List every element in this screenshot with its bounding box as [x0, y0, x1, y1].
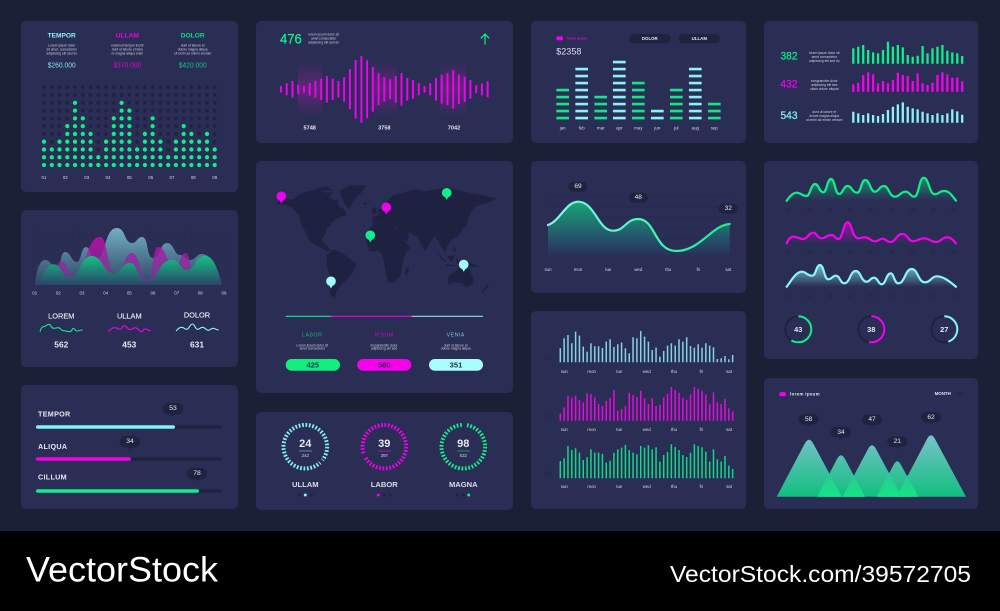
bubble: 47: 47	[868, 416, 876, 423]
row: 382	[780, 42, 962, 64]
axis labels: 09	[212, 175, 218, 180]
stat: ullam	[108, 312, 151, 349]
chart: green columns: thu	[671, 484, 678, 489]
map stat: labor: amet consectetur	[300, 347, 326, 351]
map stat: labor: 425	[306, 360, 320, 369]
stat: ullam: 453	[122, 339, 137, 349]
weekday labels: fri	[696, 267, 700, 272]
axis labels: cyan wave	[786, 294, 957, 298]
stat: 476	[280, 31, 339, 47]
chart: magenta columns: sat	[726, 427, 733, 432]
heading: dolor column: dolore magna aliqua	[178, 47, 208, 51]
stat: lorem: 562	[54, 339, 69, 349]
gauge: labor: 397	[381, 453, 389, 458]
row: 543: dolore magna aliqua	[809, 114, 839, 118]
row: 432: ullam dolore aliquat	[810, 87, 839, 91]
chart: green columns	[544, 444, 733, 489]
chart: cyan columns: sat	[726, 369, 733, 374]
chart: magenta columns: mon	[587, 427, 597, 432]
progress: cillum: 78	[193, 470, 201, 477]
chart: magenta columns: sun	[561, 427, 568, 432]
map stat: ipsum: IPSUM	[374, 332, 394, 338]
chart: cyan columns: fri	[699, 369, 703, 374]
ring: 43: 43	[794, 325, 802, 334]
map stat: ipsum	[357, 332, 411, 371]
month selector	[935, 391, 962, 396]
chart: magenta wave bars	[281, 56, 488, 123]
chart: green columns: fri	[699, 484, 703, 489]
weekday labels: sat	[725, 267, 732, 272]
heading: dolor column: Ut enim ad minim veniam	[174, 51, 212, 55]
weekday labels	[544, 267, 732, 272]
bubble: 21: 21	[894, 438, 901, 445]
wave labels: 5748	[303, 126, 316, 132]
icon: up arrow	[481, 34, 489, 44]
map pin: green africa	[366, 230, 375, 242]
heading: ullam column: eiusmod tempor incidi	[111, 43, 144, 47]
panel: weekly column charts	[531, 311, 746, 509]
month labels: feb	[579, 126, 585, 130]
map stat: ipsum: adipiscing elit sed	[371, 347, 397, 351]
chart: cyan segmented bars	[582, 60, 695, 119]
legend	[556, 36, 587, 40]
bubble: 32	[719, 204, 738, 214]
ring: 27	[931, 316, 957, 342]
stat: lorem: LOREM	[48, 312, 74, 320]
chart: magenta columns: tue	[616, 427, 623, 432]
stat: 476: lorem ipsum dolor sit	[308, 33, 339, 37]
gauge: labor	[355, 417, 414, 496]
axis labels: 02	[56, 290, 61, 296]
bubble: 34	[831, 427, 851, 439]
heading: ullam column	[111, 32, 144, 70]
axis labels	[32, 290, 227, 296]
bubble: 69: 69	[574, 183, 582, 190]
chart: green columns: sat	[726, 484, 733, 489]
month selector: MONTH	[935, 391, 951, 396]
stat: 476: 476	[280, 31, 302, 47]
row: 432: incsgraindim dolor	[811, 79, 839, 83]
footer bar	[0, 531, 1000, 611]
chart: magenta columns: 02	[544, 414, 552, 420]
bubble: 62	[921, 412, 941, 424]
axis labels	[42, 175, 218, 180]
progress: tempor: TEMPOR	[38, 410, 71, 418]
heading: dolor column: dunt ut labore et	[181, 43, 205, 47]
map pin: green russia	[442, 188, 452, 200]
row: 382: adipiscing elit sed do	[809, 59, 840, 63]
panel: radial gauges	[256, 412, 513, 510]
axis labels: cyan wave: 06	[889, 294, 895, 298]
axis labels: magenta wave: 09	[951, 249, 957, 254]
chart: green columns: sun	[561, 484, 568, 489]
stat: 476: amet consectetur	[311, 37, 337, 41]
axis labels: green wave	[786, 208, 957, 212]
axis labels: cyan wave: 04	[848, 294, 853, 298]
heading: dolor column	[174, 32, 212, 70]
panel: mountain chart	[764, 378, 978, 509]
weekday labels: wed	[634, 267, 643, 272]
gauge: ullam: 24	[299, 438, 312, 450]
chart: mountains	[777, 435, 966, 497]
axis labels: 07	[170, 175, 175, 180]
axis labels: magenta wave: 05	[869, 249, 874, 254]
month labels	[559, 126, 718, 130]
axis labels: green wave: 06	[889, 208, 895, 212]
chart: cyan columns: tue	[616, 369, 623, 374]
month labels: apr	[616, 126, 623, 130]
month labels: jun	[653, 126, 661, 130]
bubble: 47	[862, 414, 882, 427]
month labels: sep	[711, 126, 718, 130]
axis labels: cyan wave: 08	[931, 294, 936, 298]
legend: lorem ipsum	[790, 392, 820, 396]
heading: tempor column: adipiscing elit sed do	[46, 51, 77, 55]
axis labels: 05	[127, 175, 132, 180]
bubble: 62: 62	[927, 414, 935, 421]
heading: dolor column: DOLOR	[181, 32, 205, 40]
heading: ullam column: $370.000	[113, 60, 141, 70]
ring: 38: 38	[867, 325, 875, 334]
weekday labels: tue	[605, 267, 612, 272]
chart: cyan columns: sun	[561, 369, 568, 374]
axis labels: 04	[106, 175, 111, 180]
chart: cyan wave	[787, 265, 956, 287]
button: ullam: ULLAM	[692, 36, 707, 41]
chart: green columns: 03	[544, 472, 552, 478]
chart: cyan columns: wed	[643, 369, 651, 374]
ring: 27: 27	[940, 325, 948, 334]
axis labels: cyan wave: 02	[807, 294, 812, 298]
progress: aliqua: ALIQUA	[38, 442, 67, 451]
axis labels: 09	[222, 290, 227, 296]
row: 543: dunt ut labore et	[812, 110, 836, 114]
row: 543: ut enim ad minim veniam	[806, 118, 843, 122]
bubble: 58	[799, 414, 819, 426]
wave labels: 3758	[378, 126, 391, 132]
month labels: aug	[692, 126, 700, 130]
axis labels: green wave: 09	[951, 208, 957, 212]
axis labels: magenta wave: 08	[931, 249, 936, 254]
stat: dolor: DOLOR	[184, 310, 210, 320]
footer logo: VectorStock	[26, 550, 219, 590]
heading: ullam column: ULLAM	[116, 32, 139, 40]
map stat: venia	[429, 332, 483, 371]
chart: magenta columns	[544, 387, 733, 432]
map pin: cyan australia	[459, 260, 468, 272]
bubble: 48	[629, 193, 648, 203]
progress: aliqua	[36, 436, 222, 461]
axis labels: cyan wave: 03	[828, 294, 833, 298]
axis labels: magenta wave: 06	[889, 249, 895, 254]
progress: cillum	[36, 468, 222, 493]
wave glow bands	[298, 63, 466, 115]
axis labels: cyan wave: 05	[869, 294, 874, 298]
month labels: mar	[597, 126, 605, 130]
row: 432: 432	[780, 79, 798, 91]
chart: green segmented bars	[563, 82, 714, 119]
gauge: ullam: 242	[302, 453, 310, 458]
wave labels	[303, 126, 460, 132]
chart: magenta columns: fri	[699, 427, 703, 432]
axis labels: 03	[80, 290, 85, 296]
chart: cyan columns: thu	[671, 369, 678, 374]
axis labels: magenta wave: 04	[848, 249, 853, 254]
panel: progress bars	[21, 385, 238, 509]
bubble: 34: 34	[837, 429, 845, 436]
axis labels: 06	[148, 175, 154, 180]
button: dolor	[629, 34, 671, 43]
value: $2358: $2358	[556, 47, 581, 57]
panel: dot matrix chart	[21, 21, 238, 192]
gauge: magna: 98	[457, 438, 469, 450]
stat: 476: adipiscing elit sed do	[308, 41, 339, 45]
map stat: venia: dunt ut labore et	[444, 343, 468, 347]
map stat: venia: 351	[450, 360, 463, 369]
axis labels: 05	[127, 290, 132, 296]
panel: audio wave chart	[256, 21, 513, 143]
map stat: venia: dolore magna aliqua	[441, 347, 471, 351]
map stat: ipsum: Incsgraindim dolor	[371, 343, 398, 347]
chart: magenta columns: wed	[643, 427, 651, 432]
axis labels: green wave: 03	[828, 208, 833, 212]
gauge: ullam	[275, 416, 336, 496]
axis labels: 01	[42, 175, 47, 180]
weekday labels: mon	[574, 267, 583, 272]
axis labels: cyan wave: 01	[786, 294, 792, 298]
bubble: 32: 32	[725, 205, 732, 212]
gauge: magna: MAGNA	[449, 480, 478, 489]
row: 382: amet consectetur	[812, 55, 838, 59]
heading: tempor column: TEMPOR	[48, 32, 76, 40]
progress: cillum: CILLUM	[38, 472, 67, 482]
tri-colour divider line	[286, 315, 483, 317]
heading: tempor column: sit amet, consectetur	[46, 47, 78, 51]
stat: lorem	[40, 312, 83, 349]
gauge: labor: 39	[378, 438, 390, 450]
chart: green dot columns	[44, 103, 215, 165]
map stat: ipsum: 580	[378, 360, 391, 369]
row: 382: lorem ipsum dolor sit	[809, 51, 840, 55]
row: 432	[780, 72, 962, 92]
weekday labels: sun	[544, 267, 552, 272]
stat: dolor	[176, 310, 219, 349]
row: 543	[780, 102, 962, 123]
button: dolor: DOLOR	[642, 36, 659, 41]
chart: layered area waves	[33, 228, 225, 285]
axis labels: cyan wave: 07	[910, 294, 916, 298]
row: 432: adipiscing elit sed	[811, 83, 837, 87]
panel: segmented bar chart	[531, 21, 746, 143]
panel: number rows with bars	[764, 21, 978, 143]
month labels: jan	[559, 126, 566, 130]
axis labels: 02	[63, 175, 68, 180]
row: 543: 543	[780, 110, 798, 122]
grid lines	[548, 196, 730, 250]
axis labels: magenta wave: 01	[786, 249, 792, 254]
axis labels: green wave: 08	[931, 208, 936, 212]
wave labels: 7042	[448, 126, 460, 132]
axis labels: magenta wave: 07	[910, 249, 916, 254]
heading: tempor column: $260.000	[48, 60, 76, 70]
chart: cyan columns: mon	[587, 369, 597, 374]
weekday labels: thu	[665, 267, 672, 272]
axis labels: green wave: 02	[807, 208, 812, 212]
axis labels: 08	[198, 290, 203, 296]
chart: magenta columns: thu	[671, 427, 678, 432]
chart: area fill	[548, 202, 730, 257]
axis labels: 04	[103, 290, 109, 296]
chart: green columns: wed	[643, 484, 651, 489]
axis labels: 08	[191, 175, 196, 180]
ring: 38	[858, 316, 884, 342]
map: world continents	[276, 185, 497, 298]
row: 382: 382	[780, 51, 798, 63]
map stat: labor: LABOR	[302, 332, 322, 338]
month labels: jul	[673, 126, 679, 130]
gauge: ullam: ULLAM	[292, 480, 319, 489]
footer url: VectorStock.com/39572705	[670, 561, 971, 587]
chart: dark dot grid	[44, 87, 215, 165]
chart: magenta wave	[787, 222, 956, 243]
heading: ullam column: dunt ut labore et dolo	[112, 47, 143, 51]
axis labels: green wave: 01	[786, 208, 792, 212]
axis labels: green wave: 05	[869, 208, 874, 212]
chart: cyan columns	[544, 331, 733, 374]
axis labels: green wave: 04	[848, 208, 853, 212]
heading: ullam column: re magna aliqua enim	[111, 51, 143, 55]
heading: tempor column: Lorem ipsum dolor	[48, 43, 76, 47]
chart: green columns: tue	[616, 484, 623, 489]
panel: world map	[256, 161, 513, 393]
ring: 43	[785, 316, 811, 342]
gauge: magna: 532	[460, 453, 468, 458]
progress: tempor	[36, 403, 222, 429]
axis labels: green wave: 07	[910, 208, 916, 212]
heading: tempor column	[46, 32, 78, 70]
chart: line	[548, 202, 730, 251]
bubble: 69	[568, 182, 588, 192]
map stat: venia: VENIA	[447, 332, 465, 338]
bubble: 58: 58	[805, 416, 813, 423]
axis labels: 01	[32, 290, 38, 296]
map pin: cyan south america	[326, 276, 336, 288]
month labels: may	[634, 126, 643, 130]
bubble: 21	[887, 436, 907, 449]
legend: lorem ipsum	[567, 36, 587, 40]
map stat: labor: Lorem ipsum dolor sit	[297, 343, 328, 347]
heading: dolor column: $420.000	[179, 60, 207, 70]
axis labels: magenta wave: 03	[828, 249, 833, 254]
chart: green wave	[787, 178, 956, 201]
axis labels: magenta wave	[786, 249, 957, 254]
bubble: 48: 48	[635, 194, 642, 201]
panel: area chart with sparklines	[21, 210, 238, 367]
axis labels: 03	[84, 175, 90, 180]
gauge: labor: LABOR	[371, 480, 398, 489]
progress: tempor: 53	[169, 405, 177, 412]
chart: green columns: mon	[587, 484, 597, 489]
axis labels: 06	[151, 290, 156, 296]
chart: cyan columns: 01	[544, 354, 552, 362]
map stat: labor	[286, 332, 340, 371]
panel: wave lines and rings	[764, 161, 978, 359]
map pin: magenta north america	[276, 191, 286, 204]
map pin: magenta europe	[382, 202, 391, 214]
axis labels: cyan wave: 09	[951, 294, 957, 298]
stat: dolor: 631	[190, 339, 204, 349]
progress: aliqua: 34	[126, 438, 134, 445]
gauge: magna	[442, 425, 485, 496]
stat: ullam: ULLAM	[117, 312, 142, 320]
button: ullam	[679, 34, 720, 43]
axis labels: 07	[174, 290, 180, 296]
panel: weekly line chart	[531, 161, 746, 293]
axis labels: magenta wave: 02	[807, 249, 812, 254]
